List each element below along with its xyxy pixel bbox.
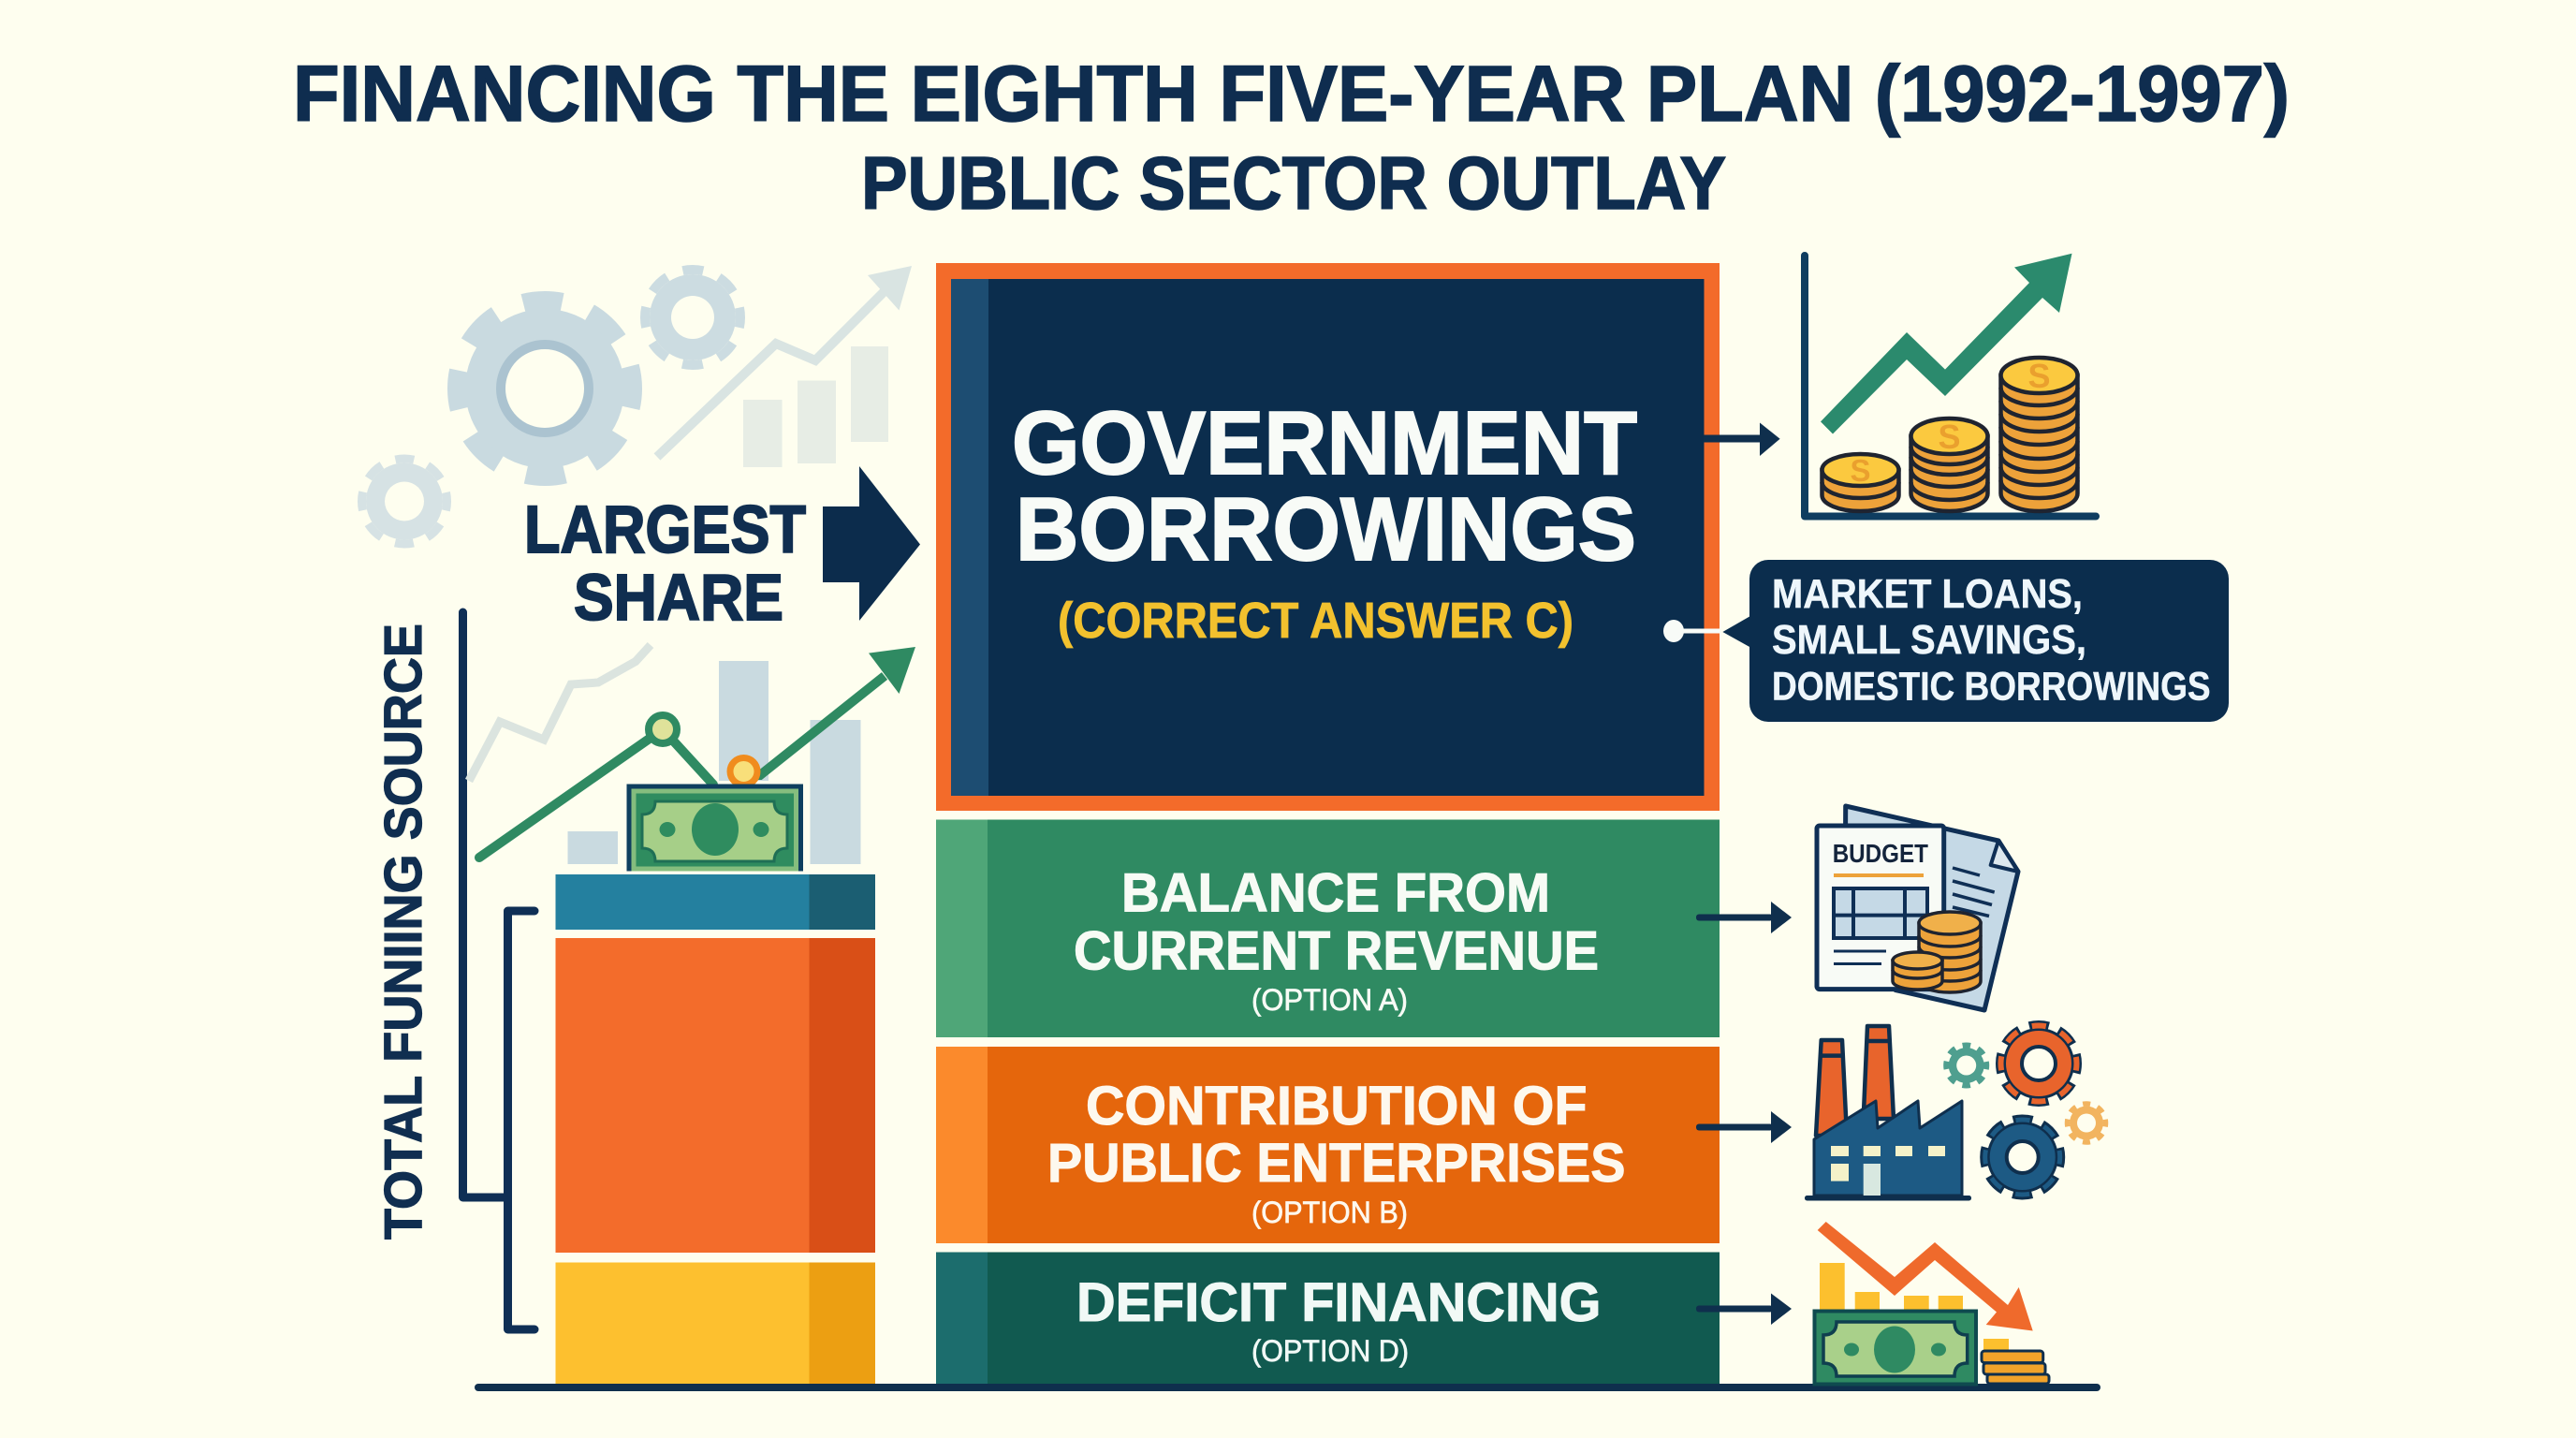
chimneys xyxy=(1816,1026,1894,1136)
gear teal xyxy=(1946,1045,1986,1086)
callout: borrowing types: DOMESTIC BORROWINGS xyxy=(1772,665,2211,710)
faint rising arrow xyxy=(657,266,912,457)
panel: contribution of public enterprises xyxy=(936,1047,1720,1243)
icon: large gear xyxy=(457,301,633,477)
green trend arrow xyxy=(479,647,915,858)
arrow: to deficit icon xyxy=(1696,1294,1792,1325)
bracket connector xyxy=(462,612,534,1329)
coin stack small: S xyxy=(1850,453,1871,488)
coins large stack xyxy=(1919,912,1981,992)
icon: banknote xyxy=(629,786,801,869)
title: PUBLIC SECTOR OUTLAY xyxy=(861,141,1726,225)
yellow bars xyxy=(1820,1263,1963,1311)
panel: balance from current revenue xyxy=(936,820,1720,1037)
stacked bar: funding sources xyxy=(556,874,875,1384)
budget word: BUDGET xyxy=(1833,839,1928,868)
heading: GOVERNMENT xyxy=(1012,393,1637,493)
segment: orange xyxy=(556,938,875,1253)
table xyxy=(1834,888,1927,938)
panel: balance from current revenue: (OPTION A) xyxy=(1251,983,1408,1017)
front page xyxy=(1817,826,1944,990)
panel: contribution of public enterprises: CONTRIBUTION OF xyxy=(1086,1076,1588,1137)
icon: coin growth chart xyxy=(1805,254,2096,517)
axis label: total funding source: TOTAL FUNIING SOURCE xyxy=(373,624,433,1240)
segment: yellow xyxy=(556,1262,875,1384)
icon: budget document xyxy=(1817,806,2018,1010)
panel: deficit financing: DEFICIT FINANCING xyxy=(1076,1272,1601,1333)
gear orange xyxy=(2000,1025,2077,1102)
icon: small gear xyxy=(361,459,447,544)
rising arrow xyxy=(1821,254,2072,434)
panel: deficit financing xyxy=(936,1253,1720,1384)
callout: borrowing types: SMALL SAVINGS, xyxy=(1772,617,2086,663)
gear navy xyxy=(1984,1119,2061,1196)
panel: contribution of public enterprises: PUBLIC ENTERPRISES xyxy=(1047,1133,1625,1194)
heading xyxy=(1012,393,1637,580)
chart axes xyxy=(1805,256,2096,517)
icon: deficit money and falling arrow xyxy=(1814,1222,2049,1384)
baseline xyxy=(475,1384,2100,1391)
back page xyxy=(1845,806,2018,1010)
coin stack medium xyxy=(1911,418,1988,511)
callout: borrowing types: MARKET LOANS, xyxy=(1772,571,2083,617)
ground xyxy=(1805,1196,1971,1200)
small coins xyxy=(1982,1339,2049,1384)
panel: contribution of public enterprises: (OPTION B) xyxy=(1251,1196,1408,1229)
coin stack small xyxy=(1822,453,1898,511)
falling arrow xyxy=(1818,1222,2033,1331)
background gears and faint growth chart xyxy=(361,266,912,544)
faint line xyxy=(469,645,651,781)
label: largest share xyxy=(524,493,806,634)
correct answer note: (CORRECT ANSWER C) xyxy=(1058,593,1573,649)
coin stack medium: S xyxy=(1938,418,1961,456)
label: largest share: LARGEST xyxy=(524,493,806,567)
panel: deficit financing: (OPTION D) xyxy=(1251,1334,1409,1368)
segment: blue xyxy=(556,874,875,930)
arrow: to factory icon xyxy=(1696,1111,1792,1143)
arrow: to budget icon xyxy=(1696,902,1792,933)
banknote xyxy=(1814,1311,1976,1384)
coin stack large: S xyxy=(2027,357,2051,395)
building xyxy=(1814,1101,1962,1196)
gear light orange xyxy=(2067,1104,2106,1142)
title: FINANCING THE EIGHTH FIVE-YEAR PLAN (1992-1997) xyxy=(293,50,2290,138)
title xyxy=(293,50,2290,225)
callout: borrowing types xyxy=(1722,560,2229,722)
arrow: to coin chart xyxy=(1704,423,1780,456)
faint bars xyxy=(743,346,888,467)
label: largest share: SHARE xyxy=(574,561,783,634)
arrow: largest share pointer xyxy=(823,466,920,621)
windows xyxy=(1831,1146,1945,1196)
faint bars xyxy=(567,661,861,864)
lower chart behind the stack xyxy=(469,645,915,869)
panel: balance from current revenue: CURRENT REVENUE xyxy=(1074,921,1599,981)
icon: factory with gears xyxy=(1805,1025,2106,1200)
coin stack large xyxy=(2001,357,2078,511)
connector dot xyxy=(1663,620,1720,642)
icon: medium gear xyxy=(645,270,740,365)
coins small stack xyxy=(1893,952,1942,990)
panel: balance from current revenue: BALANCE FROM xyxy=(1121,863,1550,923)
heading: BORROWINGS xyxy=(1016,479,1636,580)
panel: government borrowings xyxy=(936,263,1720,811)
